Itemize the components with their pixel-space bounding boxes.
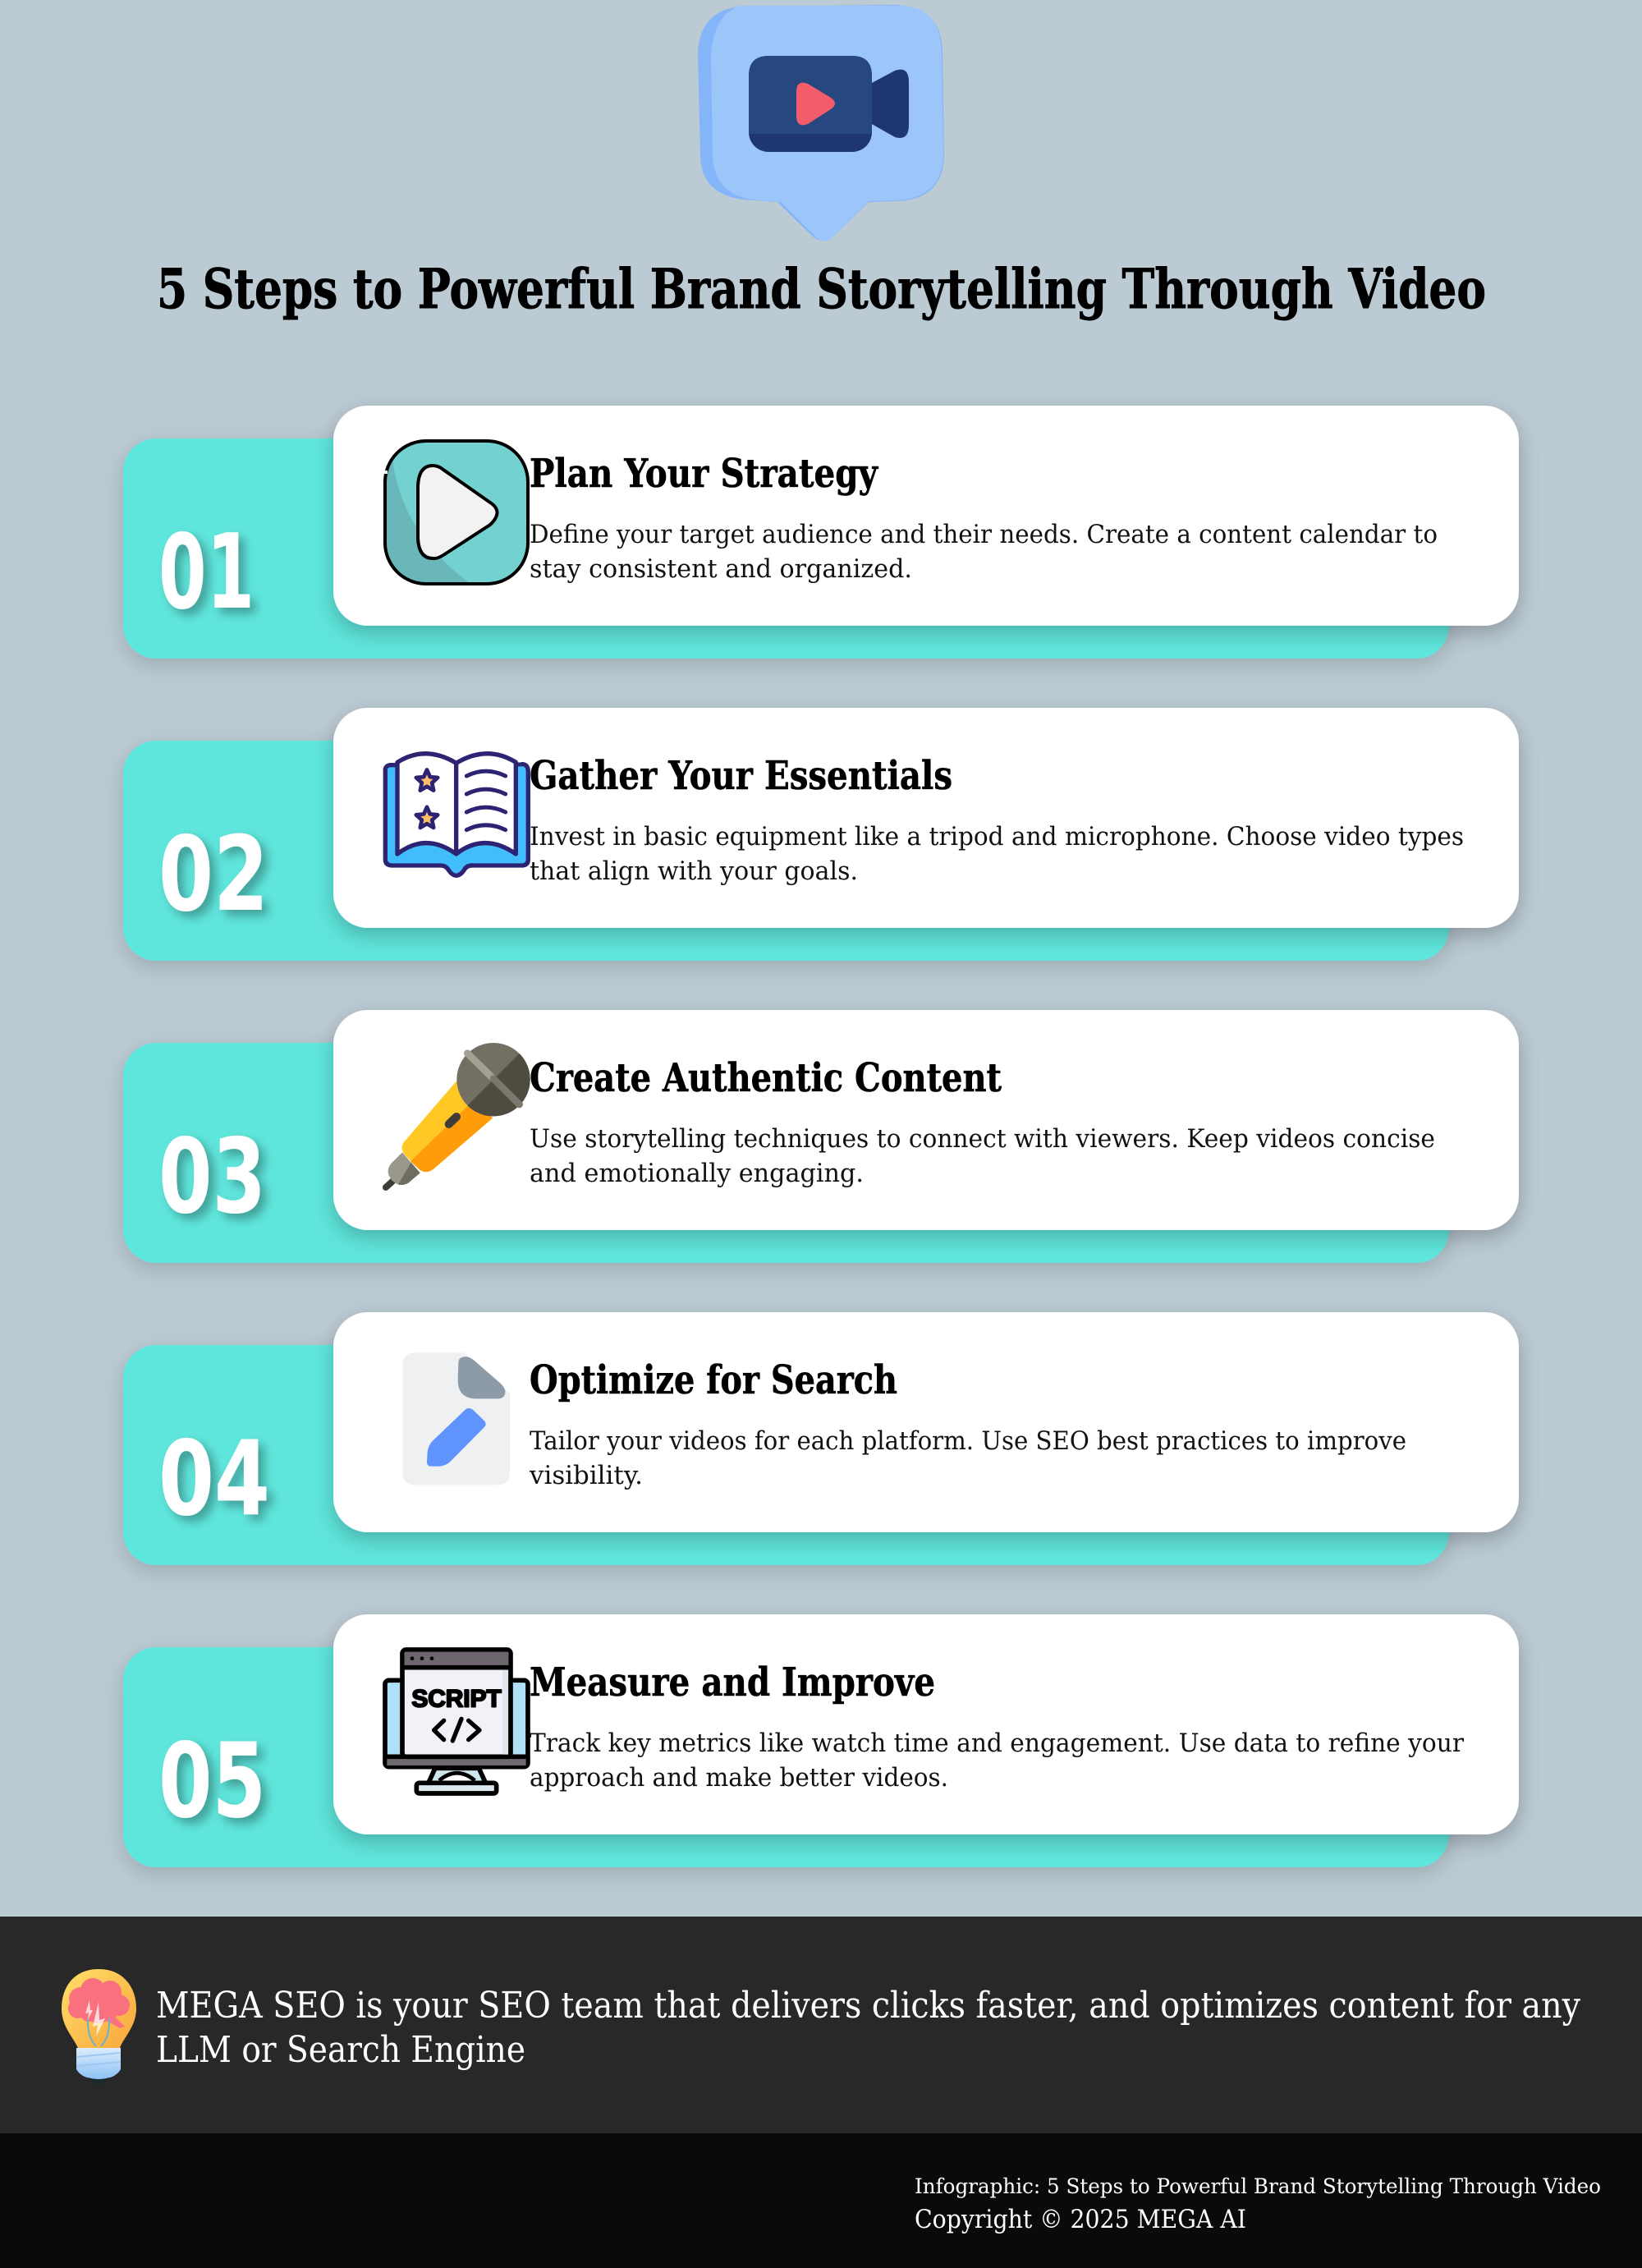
description: Invest in basic equipment like a tripod and microphone. Choose video types xyxy=(530,822,1464,852)
heading: Plan Your Strategy xyxy=(530,451,879,497)
icon: microphone xyxy=(386,1043,530,1187)
step 3 xyxy=(123,1010,1519,1263)
promo banner xyxy=(0,1917,1642,2133)
footer xyxy=(0,2133,1642,2268)
teal panel xyxy=(123,1647,1449,1867)
white card xyxy=(333,708,1519,928)
teal panel xyxy=(123,741,1449,961)
number: 04 xyxy=(158,1418,270,1539)
description xyxy=(530,1124,1435,1188)
heading: Measure and Improve xyxy=(530,1660,935,1706)
number: 02 xyxy=(158,814,268,934)
description xyxy=(530,822,1464,886)
white card xyxy=(333,1010,1519,1230)
number: 05 xyxy=(158,1720,266,1841)
step 2 xyxy=(123,708,1519,961)
step 1 xyxy=(123,406,1519,659)
teal panel xyxy=(123,438,1449,659)
teal panel xyxy=(123,1043,1449,1263)
white card xyxy=(333,1614,1519,1834)
heading: Gather Your Essentials xyxy=(530,753,952,799)
banner text xyxy=(156,1985,1580,2071)
description xyxy=(530,520,1438,584)
number: 03 xyxy=(158,1116,266,1237)
footer credit: Infographic: 5 Steps to Powerful Brand Storytelling Through Video xyxy=(915,2174,1601,2198)
description: stay consistent and organized. xyxy=(530,554,912,584)
description: visibility. xyxy=(529,1461,643,1490)
number: 01 xyxy=(158,512,255,632)
banner background xyxy=(0,1917,1642,2133)
description: Track key metrics like watch time and engagement. Use data to refine your xyxy=(530,1729,1464,1758)
icon: lightbulb with brain xyxy=(62,1969,136,2084)
white card xyxy=(333,406,1519,626)
description: and emotionally engaging. xyxy=(530,1159,864,1188)
white card xyxy=(333,1312,1519,1532)
description xyxy=(530,1729,1464,1793)
description: approach and make better videos. xyxy=(530,1763,948,1793)
copyright: Copyright © 2025 MEGA AI xyxy=(915,2205,1246,2234)
description: Define your target audience and their needs. Create a content calendar to xyxy=(530,520,1438,549)
icon: video speech bubble xyxy=(698,5,944,241)
banner text: LLM or Search Engine xyxy=(156,2029,525,2071)
teal panel xyxy=(123,1345,1449,1565)
icon: script monitor xyxy=(385,1650,528,1793)
description: Tailor your videos for each platform. Use SEO best practices to improve xyxy=(530,1426,1406,1456)
icon: script monitor: SCRIPT xyxy=(411,1685,502,1712)
heading: Create Authentic Content xyxy=(530,1055,1002,1101)
icon: open book xyxy=(385,754,528,875)
step 4 xyxy=(123,1312,1519,1565)
icon: play button xyxy=(385,441,528,584)
icon: document with pencil xyxy=(403,1352,510,1485)
description: Use storytelling techniques to connect with viewers. Keep videos concise xyxy=(530,1124,1435,1154)
heading: Optimize for Search xyxy=(530,1357,897,1403)
step 5 xyxy=(123,1614,1519,1867)
description xyxy=(529,1426,1406,1490)
footer background xyxy=(0,2133,1642,2268)
description: that align with your goals. xyxy=(530,856,858,886)
